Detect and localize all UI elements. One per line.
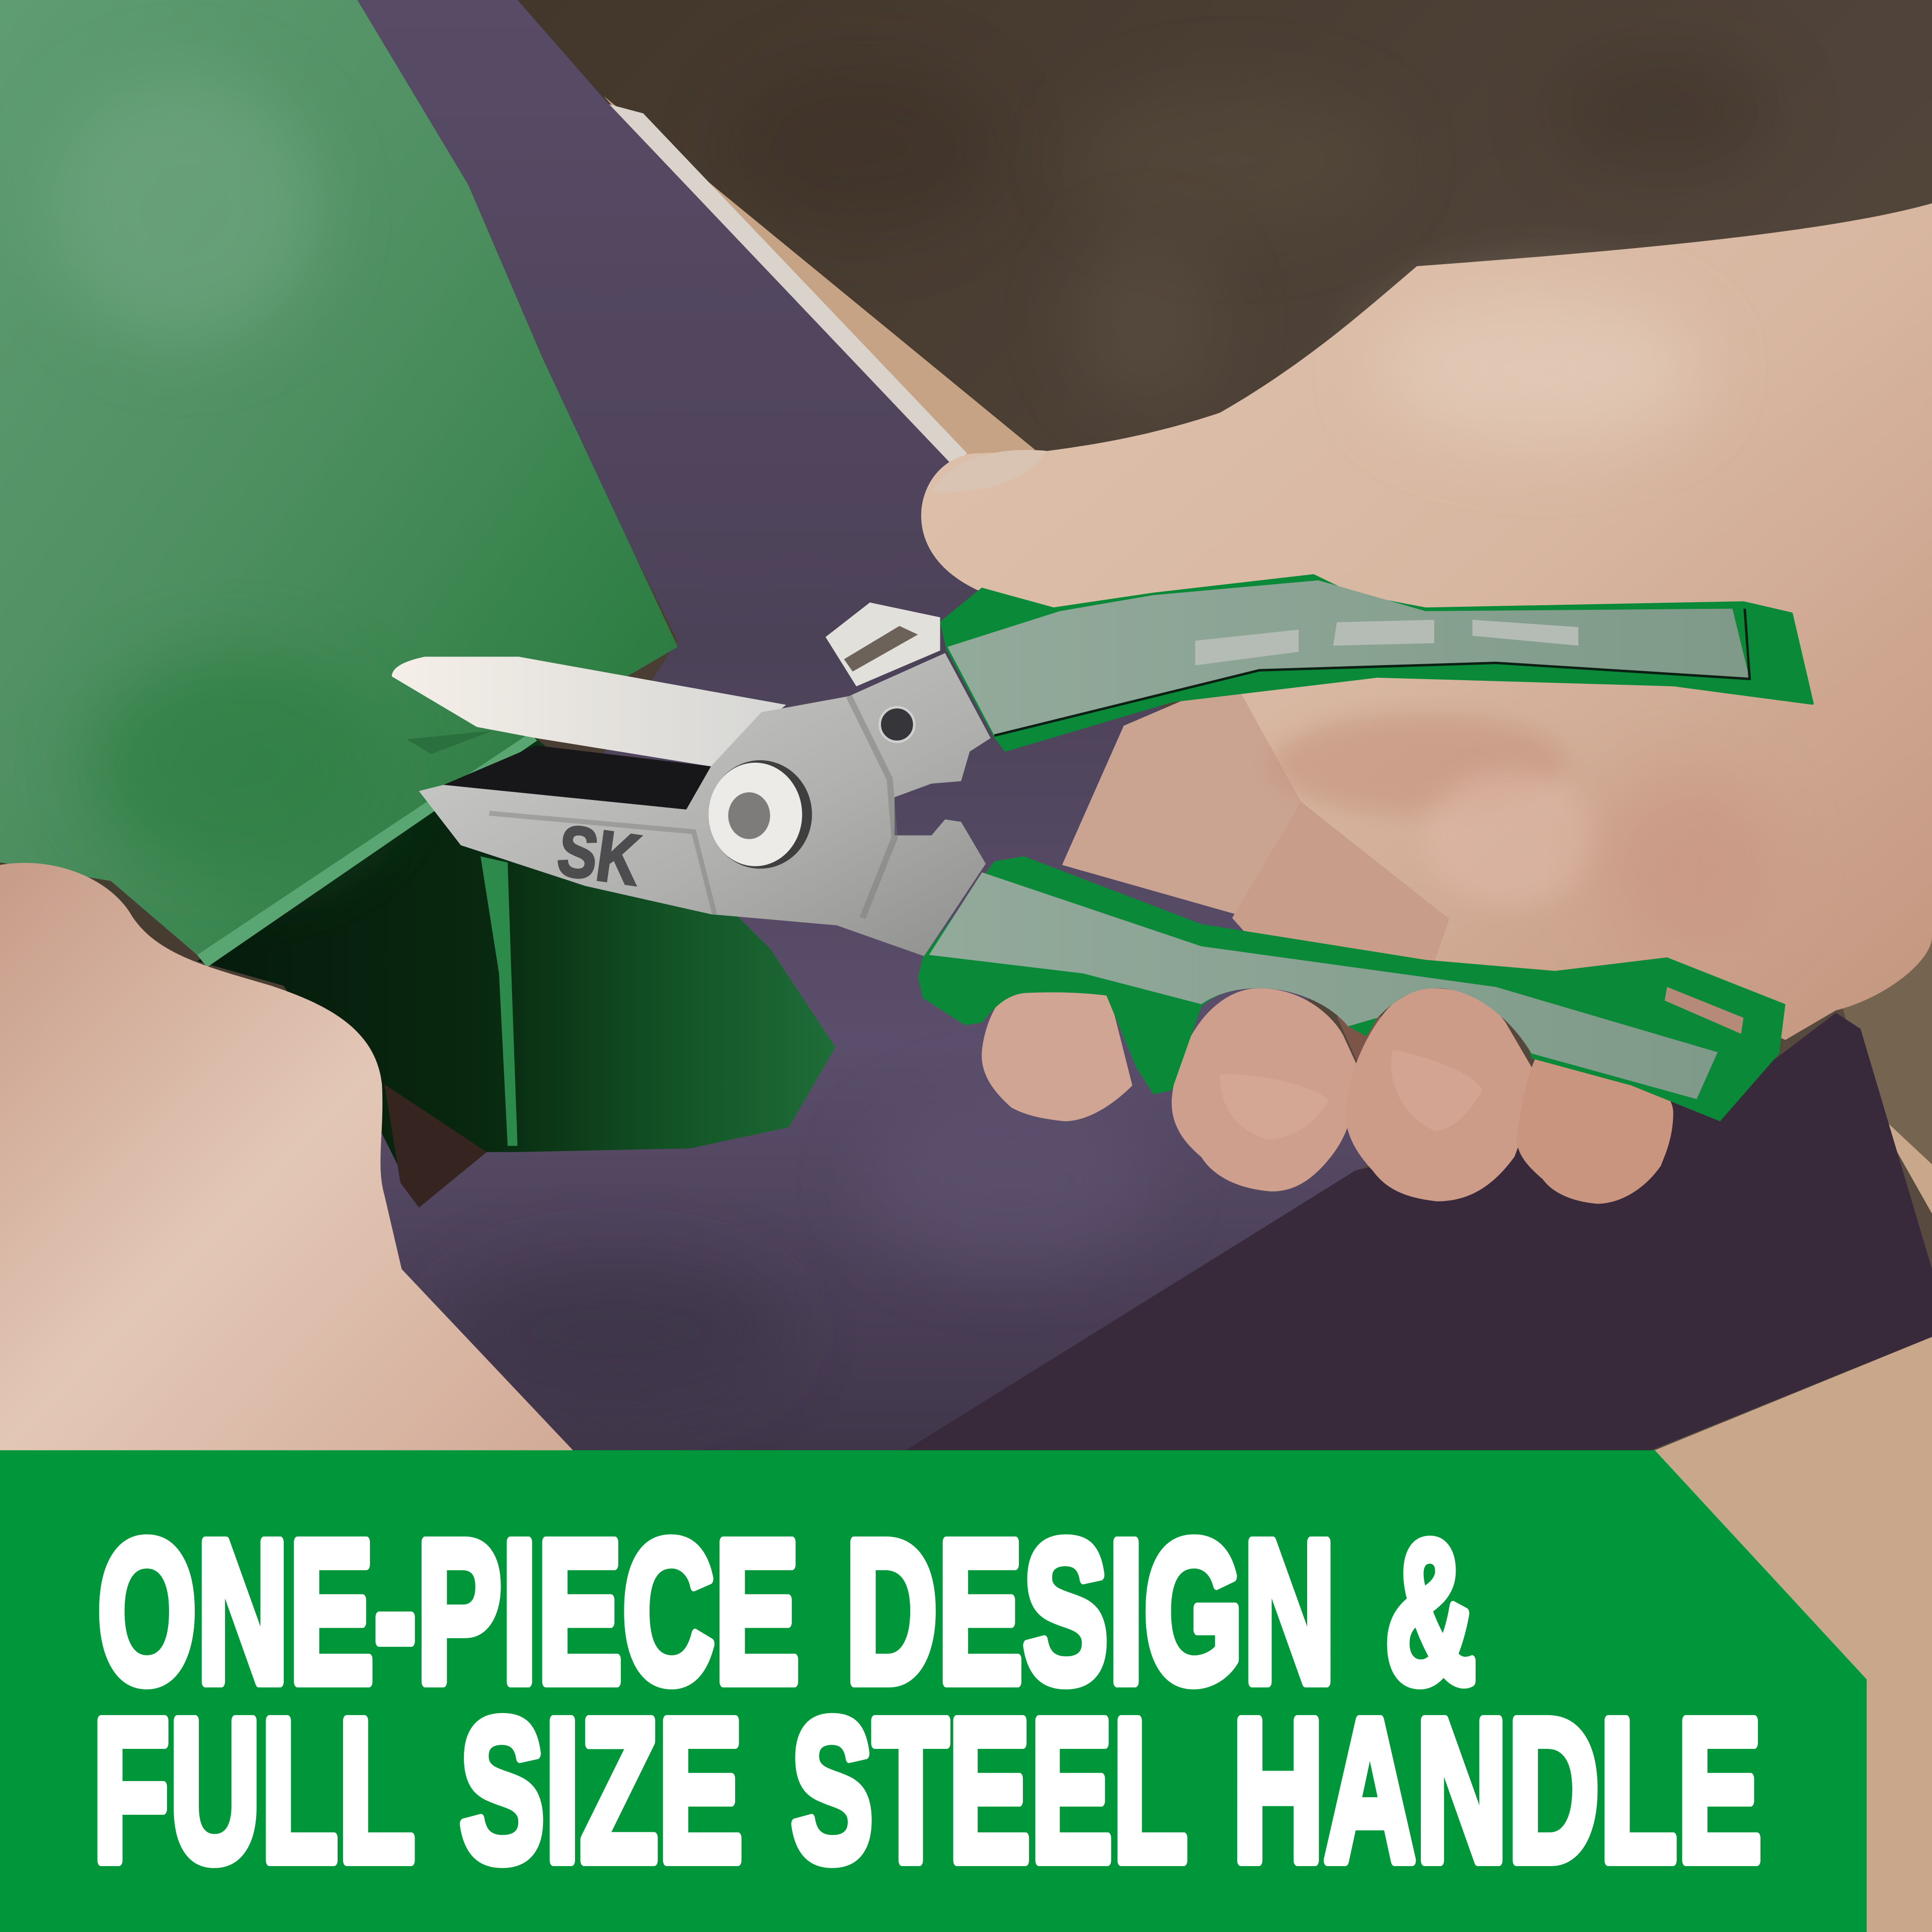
upper handle green overmold: [941, 576, 1812, 750]
headline line 1: DESIGN: [845, 1498, 1336, 1725]
panel: rolled green leather underside: [197, 733, 835, 1208]
panel: headline banner: [0, 1450, 1867, 1932]
dark purple leather sheet: [906, 1013, 1932, 1450]
small rivet: [880, 707, 914, 742]
headline line 2: [93, 1676, 1762, 1904]
headline line 2: SIZE: [459, 1676, 743, 1904]
nail of finger 2: [1220, 1074, 1328, 1140]
headline line 2: STEEL: [791, 1676, 1188, 1904]
palm shading: [1269, 714, 1565, 813]
lower handle steel inlay: [929, 872, 1718, 1099]
finger 4: [1516, 1054, 1673, 1204]
back finger two: [1232, 802, 1449, 986]
headline line 2: FULL: [93, 1676, 415, 1904]
jaw embossed ridges: [489, 813, 714, 914]
palm and back of hand: [921, 203, 1932, 1040]
top latch: [826, 603, 940, 686]
back of hand highlight: [1380, 296, 1701, 444]
finger 3: [1345, 988, 1532, 1201]
headline line 1: &: [1385, 1498, 1476, 1725]
upper handle steel inlay: [947, 580, 1750, 736]
dark blade reflection: [444, 746, 711, 810]
back finger one: [1062, 678, 1301, 914]
jaw body: [419, 653, 991, 956]
right hand: [921, 203, 1932, 1204]
nail of finger 3: [1391, 1050, 1482, 1131]
left hand: [0, 863, 573, 1450]
jaw crease: [849, 696, 895, 918]
headline line 1: ONE-PIECE: [97, 1498, 799, 1725]
panel: scissors tool: [392, 576, 1812, 1121]
upper handle slots: [1195, 620, 1578, 665]
banner background: [0, 1450, 1867, 1932]
panel: green leather sheet: [0, 0, 678, 967]
pivot bolt: [708, 760, 812, 869]
palm highlight: [1423, 770, 1595, 906]
lower handle hang hole: [1665, 987, 1743, 1034]
upper inlay shadow line: [994, 609, 1750, 736]
palm edge shading: [1602, 776, 1775, 949]
thumb nail: [930, 450, 1048, 493]
finger 1: [982, 983, 1133, 1121]
brand logo: SK: [553, 810, 645, 901]
upper blade: [392, 657, 786, 766]
finger 2: [1172, 988, 1358, 1191]
purple leather sheet: [357, 0, 1367, 1450]
shaded skin behind finger gaps: [1337, 1016, 1386, 1090]
latch shadow band: [844, 626, 918, 672]
background: pale wood table: [604, 96, 1932, 1932]
lower handle green overmold: [918, 856, 1786, 1121]
